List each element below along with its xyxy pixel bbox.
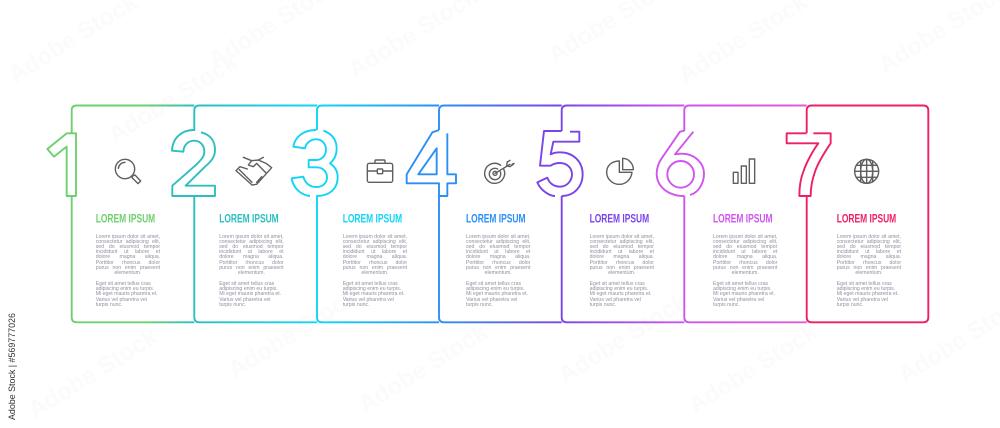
number 6	[657, 131, 704, 196]
icon: pie chart	[607, 158, 633, 184]
text block 5: elementum.	[608, 270, 635, 276]
text block 6: turpis nunc.	[713, 302, 740, 308]
text block 3: Mi eget mauris pharetra et.	[343, 291, 405, 297]
text block 4: incididunt ut labore et	[466, 249, 530, 255]
heading 2: LOREM IPSUM	[219, 211, 279, 225]
text block 5: purus non enim praesent	[590, 265, 654, 271]
number 3	[292, 130, 338, 196]
text block 1	[96, 234, 160, 308]
text: Adobe Stock	[354, 318, 492, 419]
text block 1: Mi eget mauris pharetra et.	[96, 291, 158, 297]
text block 6: Varius vel pharetra vel	[713, 297, 764, 303]
text block 5: Eget sit amet tellus cras	[590, 281, 645, 287]
text block 7: elementum.	[855, 270, 882, 276]
text block 1: purus non enim praesent	[96, 265, 160, 271]
text: Adobe Stock	[24, 323, 162, 424]
text block 6: dolore magna aliqua.	[713, 254, 777, 260]
card outline 3	[317, 106, 439, 322]
text block 4	[466, 234, 530, 308]
text block 5: Lorem ipsum dolor sit amet,	[590, 234, 654, 240]
text block 2: adipiscing enim eu turpis.	[219, 286, 278, 292]
text block 1: turpis nunc.	[96, 302, 123, 308]
text block 7: purus non enim praesent	[837, 265, 901, 271]
text block 3	[342, 234, 407, 308]
text block 4: sed do eiusmod tempor	[466, 244, 530, 250]
text: Adobe Stock	[224, 283, 362, 384]
text block 1: elementum.	[114, 270, 141, 276]
text block 2: dolore magna aliqua.	[219, 254, 284, 260]
text block 2: turpis nunc.	[219, 302, 246, 308]
text block 5	[590, 234, 654, 308]
card outline 2	[194, 106, 317, 322]
text: Adobe Stock	[104, 48, 242, 149]
text block 4: elementum.	[485, 270, 512, 276]
text block 3: Varius vel pharetra vel	[343, 297, 394, 303]
card outline 5	[562, 106, 684, 322]
card outline 7	[807, 106, 928, 322]
text block 3: Eget sit amet tellus cras	[343, 281, 398, 287]
card outline 4	[439, 106, 562, 322]
text block 3: consectetur adipiscing elit,	[343, 239, 407, 245]
icon: target with dart	[485, 160, 514, 183]
text block 4: adipiscing enim eu turpis.	[466, 286, 525, 292]
text block 2: elementum.	[238, 270, 265, 276]
text block 1: sed do eiusmod tempor	[96, 244, 160, 250]
text block 7: Eget sit amet tellus cras	[837, 281, 892, 287]
text block 7	[836, 234, 901, 308]
heading 1: LOREM IPSUM	[96, 211, 155, 225]
text block 3: sed do eiusmod tempor	[343, 244, 407, 250]
text block 1: incididunt ut labore et	[96, 249, 160, 255]
text block 1: adipiscing enim eu turpis.	[96, 286, 154, 292]
text block 7: consectetur adipiscing elit,	[837, 239, 901, 245]
text block 2: Mi eget mauris pharetra et.	[219, 291, 281, 297]
text block 2: purus non enim praesent	[219, 265, 284, 271]
icon: magnifying glass	[115, 159, 141, 184]
text block 7: Porttitor rhoncus dolor	[837, 260, 901, 266]
text block 1: Porttitor rhoncus dolor	[96, 260, 160, 266]
text block 1: Varius vel pharetra vel	[96, 297, 147, 303]
text block 5: adipiscing enim eu turpis.	[590, 286, 648, 292]
text block 5: consectetur adipiscing elit,	[590, 239, 654, 245]
text block 6: incididunt ut labore et	[713, 249, 777, 255]
text block 6: Eget sit amet tellus cras	[713, 281, 768, 287]
text block 3: incididunt ut labore et	[343, 249, 407, 255]
text block 6: Mi eget mauris pharetra et.	[713, 291, 775, 297]
text block 1: Eget sit amet tellus cras	[96, 281, 151, 287]
text block 4: Lorem ipsum dolor sit amet,	[466, 234, 530, 240]
text block 6: Lorem ipsum dolor sit amet,	[713, 234, 777, 240]
text block 2: Varius vel pharetra vel	[219, 297, 270, 303]
panel: step 5	[536, 104, 684, 324]
text block 5: incididunt ut labore et	[590, 249, 654, 255]
heading 7: LOREM IPSUM	[837, 211, 896, 225]
text: Adobe Stock	[554, 288, 692, 389]
text block 4: consectetur adipiscing elit,	[466, 239, 530, 245]
text block 4: Porttitor rhoncus dolor	[466, 260, 530, 266]
heading 6: LOREM IPSUM	[713, 211, 772, 225]
panel: step 3	[290, 104, 439, 324]
text block 3: dolore magna aliqua.	[343, 254, 407, 260]
text block 7: sed do eiusmod tempor	[837, 244, 901, 250]
text block 4: Varius vel pharetra vel	[466, 297, 517, 303]
text block 1: dolore magna aliqua.	[96, 254, 160, 260]
text block 7: turpis nunc.	[837, 302, 864, 308]
number 5	[537, 131, 583, 196]
text block 7: dolore magna aliqua.	[837, 254, 901, 260]
text block 3: Lorem ipsum dolor sit amet,	[343, 234, 407, 240]
text block 5: sed do eiusmod tempor	[590, 244, 654, 250]
text block 3: Porttitor rhoncus dolor	[343, 260, 407, 266]
stock id caption: Adobe Stock | #569777026	[7, 313, 17, 420]
panel: step 7	[786, 104, 930, 324]
text block 4: Mi eget mauris pharetra et.	[466, 291, 528, 297]
text block 5: Mi eget mauris pharetra et.	[590, 291, 652, 297]
panel: step 2	[171, 104, 317, 324]
text block 3: turpis nunc.	[343, 302, 370, 308]
text block 2: sed do eiusmod tempor	[219, 244, 284, 250]
text block 5: turpis nunc.	[590, 302, 616, 308]
text block 3: purus non enim praesent	[343, 265, 407, 271]
number 4	[407, 130, 456, 196]
text block 7: Mi eget mauris pharetra et.	[837, 291, 899, 297]
number 1	[47, 133, 76, 196]
text block 4: purus non enim praesent	[466, 265, 530, 271]
text block 6: sed do eiusmod tempor	[713, 244, 777, 250]
text block 6: adipiscing enim eu turpis.	[713, 286, 772, 292]
text block 3: elementum.	[361, 270, 388, 276]
icon: bar chart	[733, 159, 755, 183]
panel: step 6	[656, 104, 807, 324]
text block 7: incididunt ut labore et	[837, 249, 901, 255]
text block 6: Porttitor rhoncus dolor	[713, 260, 777, 266]
icon: globe	[855, 159, 879, 183]
text block 5: Varius vel pharetra vel	[590, 297, 641, 303]
icon: handshake	[236, 157, 272, 185]
text block 2: Porttitor rhoncus dolor	[219, 260, 284, 266]
heading 5: LOREM IPSUM	[590, 211, 649, 225]
heading 3: LOREM IPSUM	[343, 211, 402, 225]
text block 2: Eget sit amet tellus cras	[219, 281, 274, 287]
text block 7: Varius vel pharetra vel	[837, 297, 888, 303]
text block 6: consectetur adipiscing elit,	[713, 239, 777, 245]
text block 5: Porttitor rhoncus dolor	[590, 260, 654, 266]
heading 4: LOREM IPSUM	[466, 211, 526, 225]
text block 6: purus non enim praesent	[713, 265, 777, 271]
text block 2	[219, 234, 284, 308]
card outline 1	[72, 106, 194, 322]
panel: step 4	[406, 104, 562, 324]
text block 7: Lorem ipsum dolor sit amet,	[837, 234, 901, 240]
number 2	[172, 130, 215, 196]
text block 1: consectetur adipiscing elit,	[96, 239, 160, 245]
panel: step 1	[46, 104, 194, 324]
text block 5: dolore magna aliqua.	[590, 254, 654, 260]
text block 1: Lorem ipsum dolor sit amet,	[96, 234, 160, 240]
text block 2: Lorem ipsum dolor sit amet,	[219, 234, 284, 240]
text block 7: adipiscing enim eu turpis.	[837, 286, 895, 292]
text block 6	[713, 234, 778, 308]
text block 4: dolore magna aliqua.	[466, 254, 530, 260]
card outline 6	[684, 106, 807, 322]
number 7	[787, 133, 831, 196]
icon: briefcase	[367, 160, 393, 182]
text block 3: adipiscing enim eu turpis.	[343, 286, 401, 292]
text block 2: consectetur adipiscing elit,	[219, 239, 284, 245]
text block 2: incididunt ut labore et	[219, 249, 284, 255]
text block 4: Eget sit amet tellus cras	[466, 281, 521, 287]
text: Adobe Stock	[684, 318, 822, 419]
text block 4: turpis nunc.	[466, 302, 493, 308]
text block 6: elementum.	[732, 270, 759, 276]
